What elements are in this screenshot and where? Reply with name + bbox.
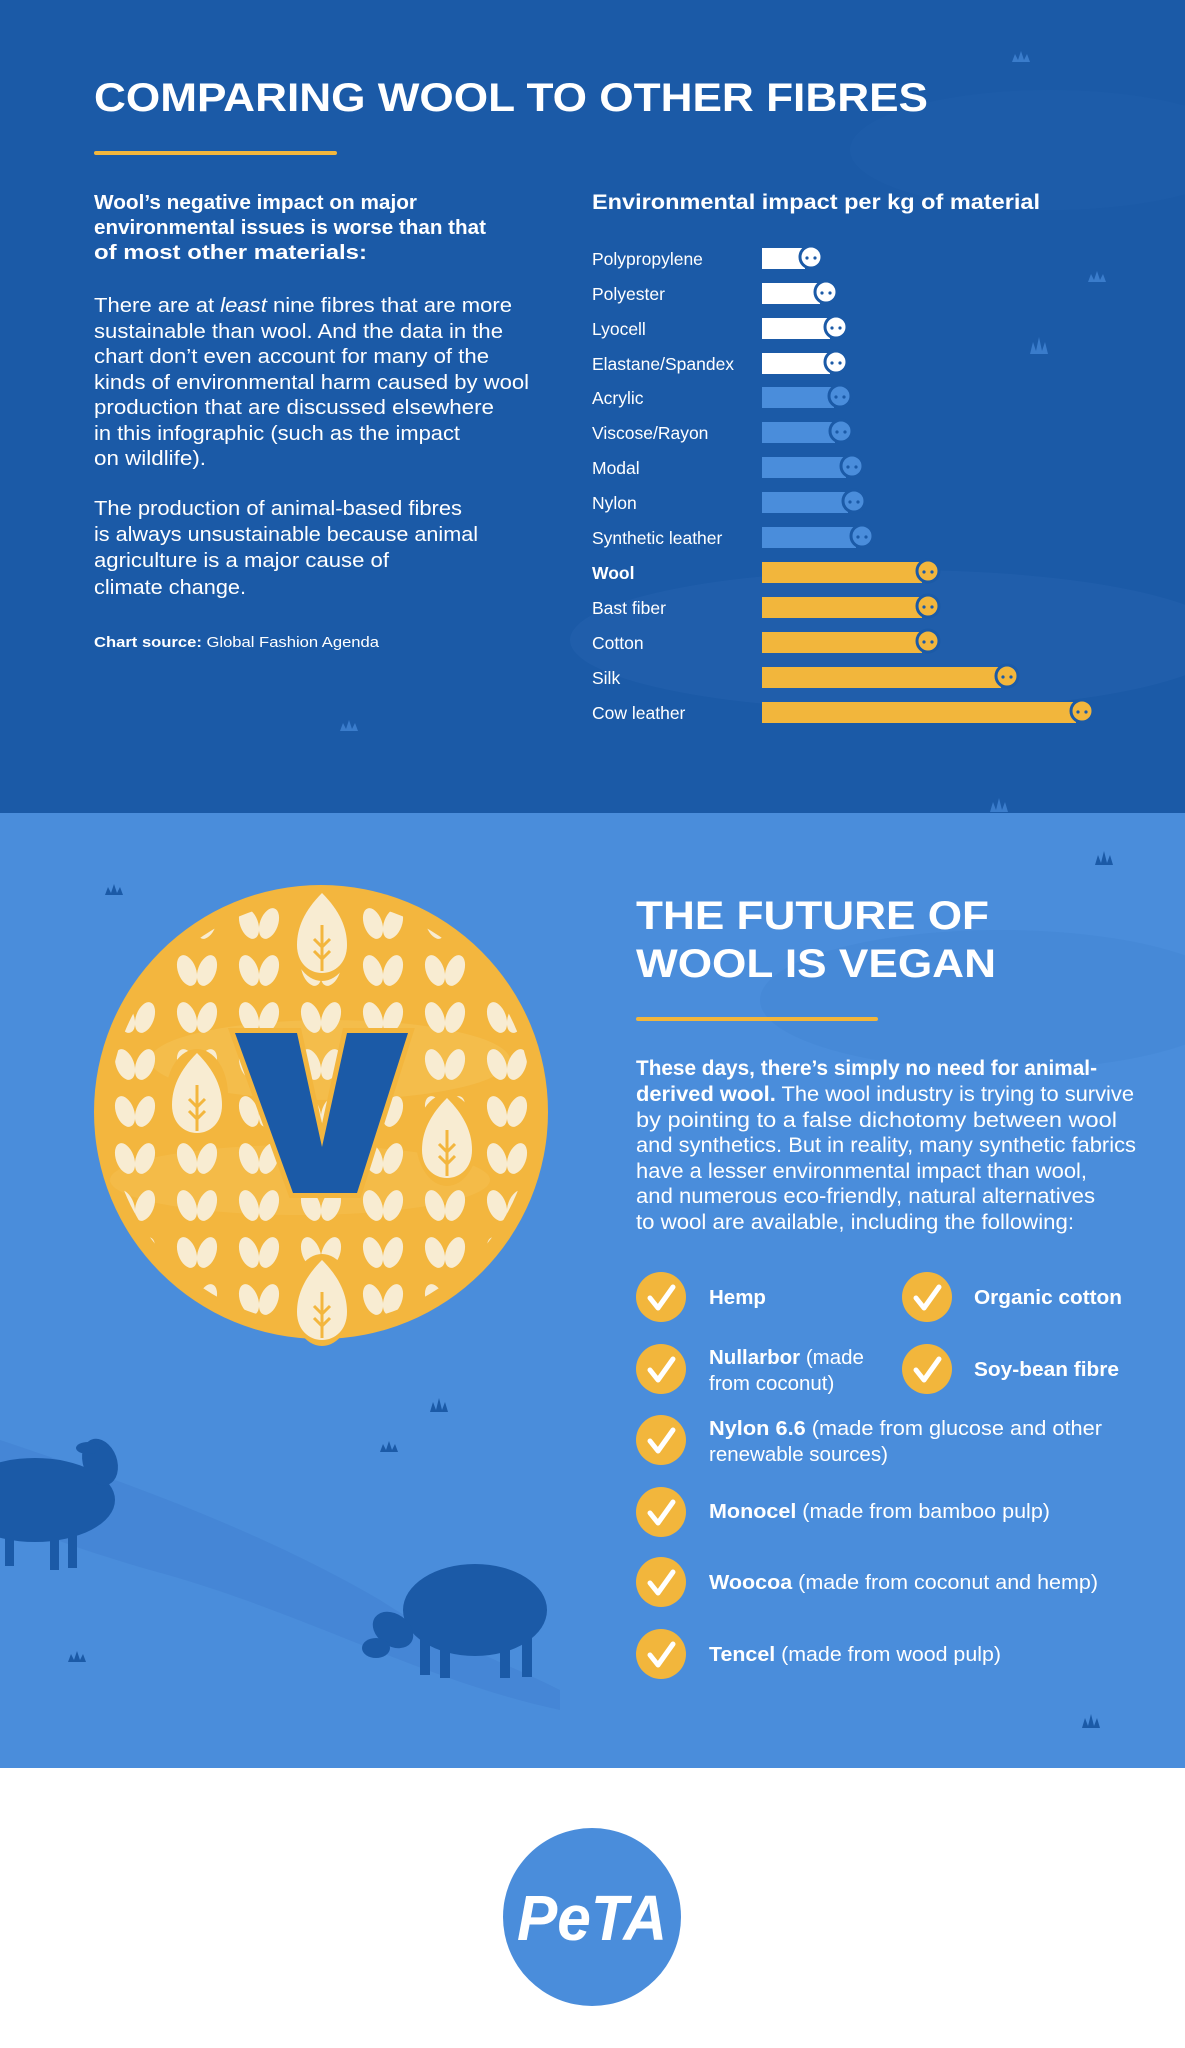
text block: intro: agriculture is a major cause of: [94, 549, 389, 572]
bar chart: environmental impact: Polyester: [592, 284, 665, 304]
title underline: [94, 151, 337, 155]
checklist: alternatives: Soy-bean fibre: [974, 1358, 1119, 1381]
bar chart: environmental impact: Nylon: [592, 493, 637, 513]
decorative grass tufts: [68, 851, 1113, 1728]
title: the future of wool is vegan: WOOL IS VEGAN: [636, 942, 996, 986]
icon: grazing sheep: [362, 1564, 547, 1678]
bar chart: environmental impact: Viscose/Rayon: [592, 423, 708, 443]
checklist: alternatives: Nylon 6.6 (made from glucose and other: [709, 1417, 1102, 1440]
bar chart: environmental impact: Cotton: [592, 633, 644, 653]
text block: intro: climate change.: [94, 576, 246, 599]
text block: intro: Wool’s negative impact on major: [94, 191, 417, 214]
checklist: alternatives: Monocel (made from bamboo pulp): [709, 1500, 1050, 1523]
text block: intro: chart don’t even account for many of the: [94, 345, 489, 368]
icon: vegan V circle: [94, 885, 548, 1346]
checklist: alternatives: Hemp: [709, 1286, 766, 1309]
text block: intro: environmental issues is worse than that: [94, 216, 486, 239]
checklist: alternatives: Woocoa (made from coconut and hemp): [709, 1571, 1098, 1594]
bar chart: environmental impact: Cow leather: [592, 703, 686, 723]
skulls: [800, 246, 1093, 722]
bar chart: environmental impact: Polypropylene: [592, 249, 703, 269]
text block: vegan wool intro: by pointing to a false dichotomy between wool: [636, 1109, 1117, 1132]
text block: vegan wool intro: [636, 1057, 1136, 1234]
text block: intro: on wildlife).: [94, 447, 206, 470]
bar chart: environmental impact: [592, 246, 1093, 723]
text block: intro: production that are discussed elsewhere: [94, 396, 494, 419]
text block: intro: in this infographic (such as the impact: [94, 422, 460, 445]
panel: comparing wool background: [0, 0, 1185, 813]
checklist: alternatives: renewable sources): [709, 1443, 888, 1466]
text block: vegan wool intro: have a lesser environmental impact than wool,: [636, 1160, 1087, 1183]
text block: vegan wool intro: These days, there’s simply no need for animal-: [636, 1057, 1097, 1080]
text block: intro: of most other materials:: [94, 241, 367, 264]
panel: future of wool background: [0, 813, 1185, 1768]
chart title: Environmental impact per kg of material: [592, 190, 1040, 214]
icon: standing sheep: [0, 1434, 124, 1570]
bar chart: environmental impact: Lyocell: [592, 319, 646, 339]
text block: vegan wool intro: and numerous eco-friendly, natural alternatives: [636, 1185, 1095, 1208]
bar chart: environmental impact: Modal: [592, 458, 640, 478]
title: the future of wool is vegan: THE FUTURE OF: [636, 894, 989, 938]
text block: vegan wool intro: to wool are available, including the following:: [636, 1211, 1074, 1234]
text block: intro: sustainable than wool. And the data in the: [94, 320, 503, 343]
logo: PETA: PeTA: [517, 1882, 667, 1954]
text block: intro: [94, 191, 529, 599]
checklist: alternatives: Organic cotton: [974, 1286, 1122, 1309]
text block: intro: The production of animal-based fibres: [94, 497, 462, 520]
title underline: [636, 1017, 878, 1021]
checklist: alternatives: Tencel (made from wood pulp): [709, 1643, 1001, 1666]
bar chart: environmental impact: Acrylic: [592, 388, 644, 408]
bar chart: environmental impact: Elastane/Spandex: [592, 354, 734, 374]
bar chart: environmental impact: Bast fiber: [592, 598, 666, 618]
text block: vegan wool intro: derived wool. The wool industry is trying to survive: [636, 1083, 1134, 1106]
text block: intro: There are at least nine fibres that are more: [94, 294, 512, 317]
checklist: alternatives: Nullarbor (made: [709, 1346, 864, 1369]
bar chart: environmental impact: Wool: [592, 563, 634, 583]
checklist: alternatives: from coconut): [709, 1372, 834, 1395]
text block: vegan wool intro: and synthetics. But in reality, many synthetic fabrics: [636, 1134, 1136, 1157]
checklist: alternatives: [636, 1272, 1122, 1679]
title: the future of wool is vegan: [636, 894, 996, 986]
text block: intro: is always unsustainable because animal: [94, 523, 478, 546]
bar chart: environmental impact: Silk: [592, 668, 620, 688]
bar chart: environmental impact: Synthetic leather: [592, 528, 723, 548]
title: comparing wool to other fibres: COMPARING WOOL TO OTHER FIBRES: [94, 76, 928, 120]
logo: PETA: [503, 1828, 681, 2006]
chart source: Chart source: Global Fashion Agenda: [94, 635, 380, 651]
text block: intro: kinds of environmental harm caused by wool: [94, 371, 529, 394]
